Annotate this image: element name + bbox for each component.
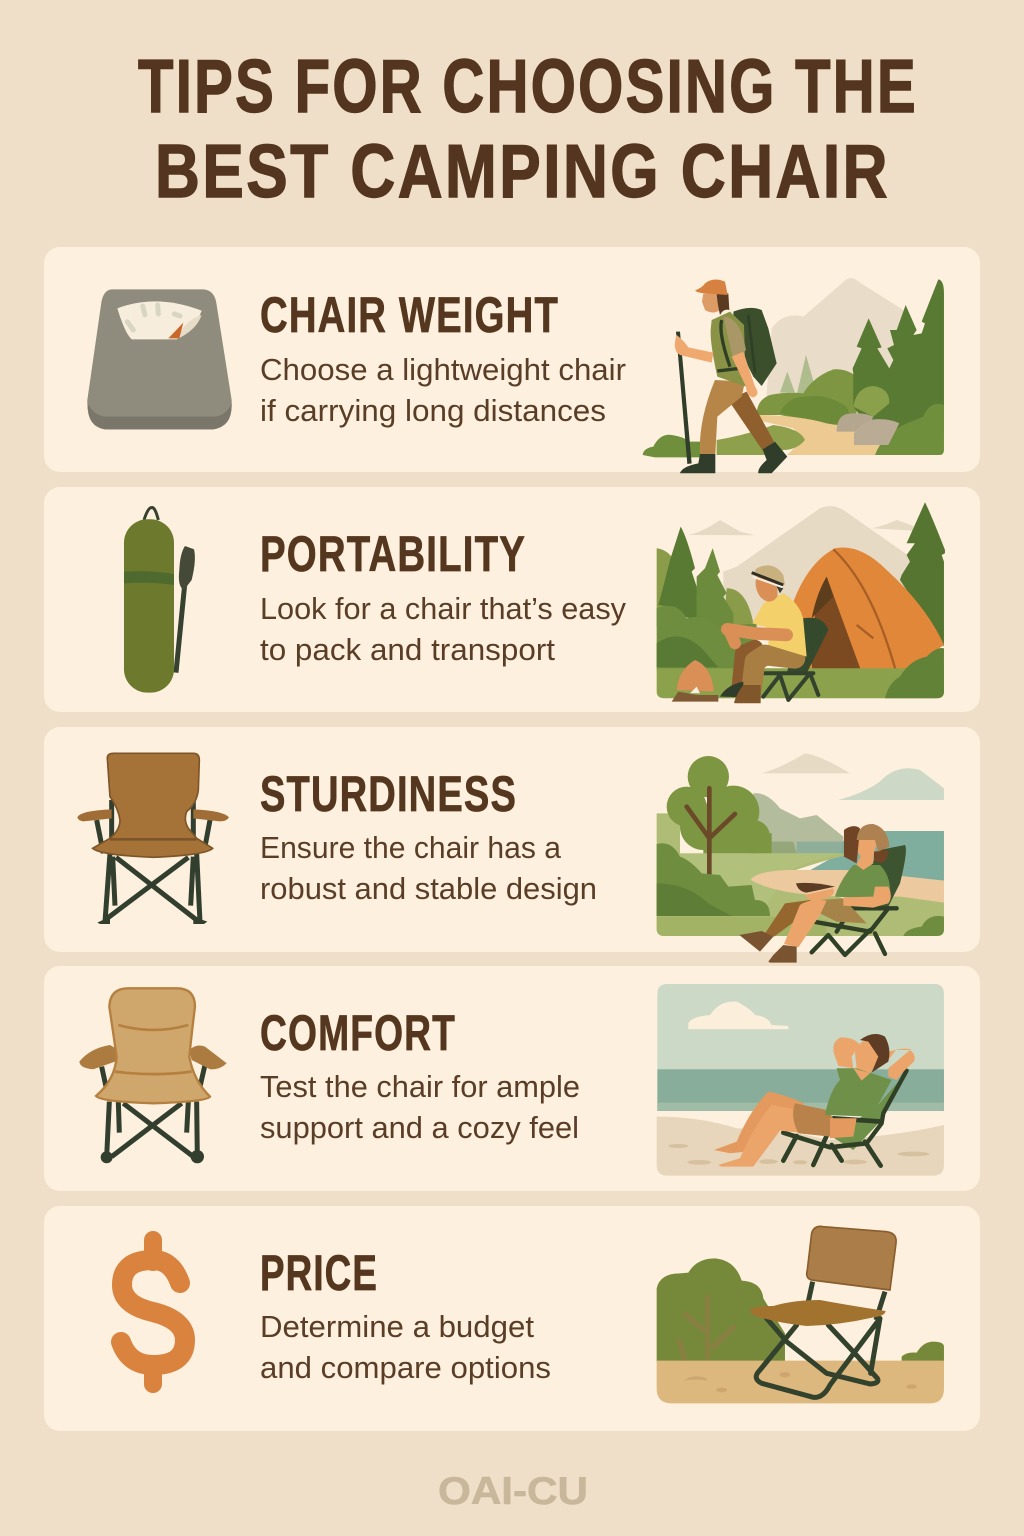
panel: price (44, 1206, 980, 1431)
heading: portability: PORTABILITY (260, 526, 526, 582)
text: sturdiness (260, 830, 597, 906)
illustration: woman relaxing in chair by lake (657, 753, 944, 963)
icon: dollar sign (121, 1240, 185, 1384)
text: chair weight: Choose a lightweight chair (260, 352, 626, 387)
text: sturdiness: robust and stable design (260, 871, 597, 906)
text: portability: Look for a chair that’s easy (260, 591, 626, 626)
text: comfort: Test the chair for ample (260, 1069, 580, 1104)
icon: weight scale (87, 289, 232, 429)
panel: comfort (44, 966, 980, 1191)
heading: comfort: COMFORT (260, 1005, 456, 1061)
heading: price: PRICE (260, 1245, 378, 1301)
heading: chair weight: CHAIR WEIGHT (260, 287, 559, 343)
illustration: folding chair on sand (657, 1226, 944, 1403)
text: chair weight: if carrying long distances (260, 393, 606, 428)
title: BEST CAMPING CHAIR (155, 129, 890, 213)
text: comfort: support and a cozy feel (260, 1110, 579, 1145)
panel: chair weight (44, 247, 980, 473)
illustration: hiker on a forest trail (643, 278, 944, 473)
icon: sturdy brown chair (77, 753, 229, 924)
icon: chair carry bag (124, 508, 195, 693)
text: sturdiness: Ensure the chair has a (260, 830, 562, 865)
text: price (260, 1309, 551, 1385)
watermark: OAI-CU (438, 1470, 588, 1513)
heading: sturdiness: STURDINESS (260, 766, 517, 822)
text: portability: to pack and transport (260, 632, 555, 667)
text: comfort (260, 1069, 580, 1145)
icon: comfort tan chair (79, 988, 227, 1163)
text: chair weight (260, 352, 626, 428)
illustration: person reclining on beach (657, 984, 944, 1176)
text: price: and compare options (260, 1350, 551, 1385)
text: price: Determine a budget (260, 1309, 534, 1344)
text: portability (260, 591, 626, 667)
title (138, 44, 918, 213)
panel: portability (44, 487, 980, 712)
illustration: man seated by tent and campfire (657, 502, 945, 703)
panel: sturdiness (44, 727, 980, 963)
